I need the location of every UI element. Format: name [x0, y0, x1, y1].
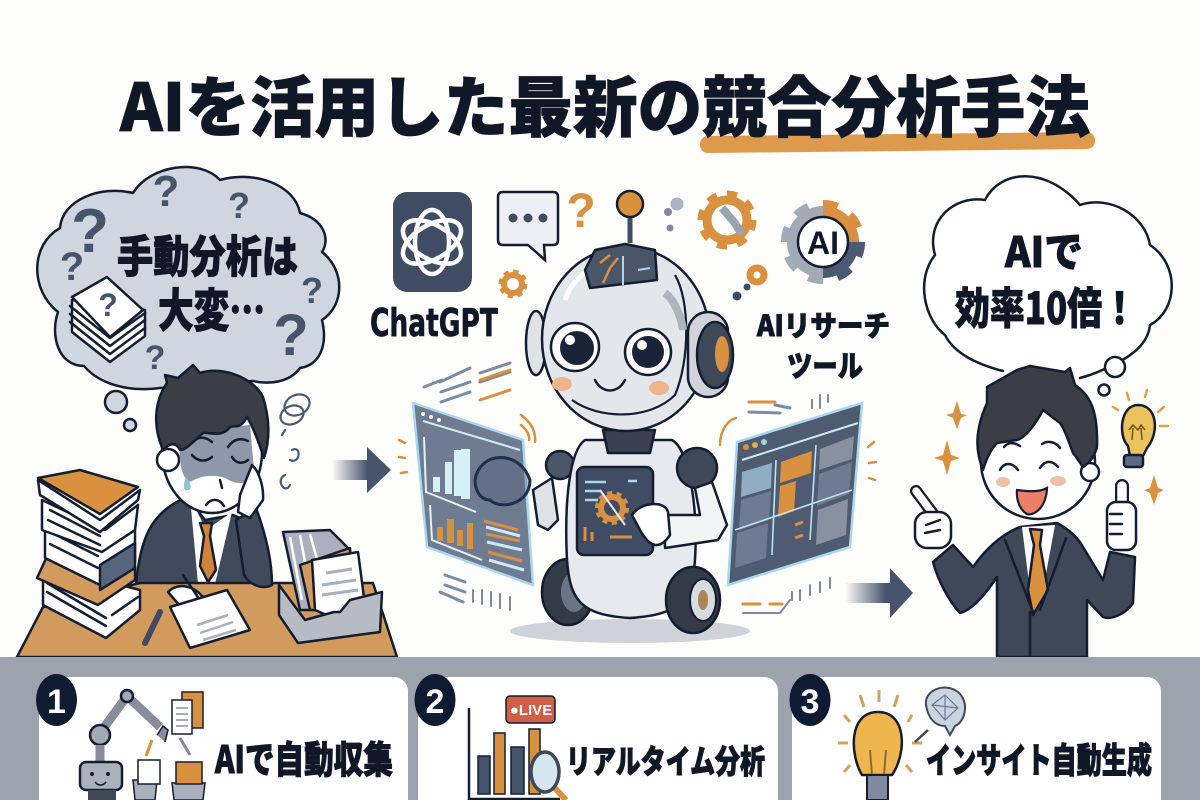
thought bubble small	[124, 419, 136, 431]
left thought cloud	[37, 167, 339, 431]
cheeks and smile	[552, 377, 669, 395]
paper stack	[70, 277, 145, 362]
AI tool label line two: ツール	[787, 344, 863, 387]
head	[981, 405, 1099, 519]
cloud text: AIで	[1004, 219, 1083, 280]
icon: lightbulb and brain	[838, 688, 965, 800]
dizzy scribble	[277, 390, 313, 488]
question marks: ?	[60, 245, 84, 289]
panel: step 1	[36, 674, 408, 800]
question marks: ?	[273, 303, 309, 368]
small orange gear	[501, 272, 525, 296]
left holographic screen	[413, 403, 533, 585]
right arm and hand	[632, 448, 727, 548]
propping arm	[236, 508, 272, 587]
suit	[135, 497, 271, 592]
question marks: ?	[71, 197, 109, 266]
head panel	[585, 244, 657, 288]
neck	[603, 430, 655, 453]
cloud text line two: 効率10倍！	[955, 274, 1137, 337]
right headphone	[688, 312, 733, 397]
badge 1	[36, 674, 77, 726]
worried man at desk	[17, 365, 397, 657]
cloud text: 手動分析は	[117, 221, 298, 285]
robot	[475, 191, 750, 643]
question marks: ?	[228, 185, 250, 226]
badge 2	[414, 674, 456, 726]
eyes	[551, 323, 671, 375]
step 1 label: AIで自動収集	[214, 730, 393, 784]
right holographic screen	[728, 403, 862, 585]
book stack	[37, 470, 140, 638]
happy man	[915, 366, 1168, 657]
hair	[156, 365, 268, 458]
question marks: ?	[301, 270, 323, 311]
helmet details	[565, 270, 686, 414]
shirt and tie	[190, 497, 232, 584]
pen	[145, 612, 160, 643]
floor shadow	[510, 619, 750, 643]
sparkles	[934, 401, 1164, 505]
speech bubble	[498, 192, 558, 260]
cloud text line two: 大変…	[158, 274, 265, 341]
lightbulb	[1113, 390, 1168, 467]
badge 1: 1	[47, 683, 66, 721]
step 3 label: インサイト自動生成	[926, 733, 1152, 784]
left screen orange bars	[437, 519, 473, 549]
bubble large	[1105, 357, 1125, 377]
writing hand and pencil	[168, 575, 208, 612]
badge 2: 2	[426, 683, 444, 721]
right thought cloud	[924, 176, 1172, 396]
data lines top left	[424, 363, 510, 402]
ChatGPT label: ChatGPT	[370, 302, 499, 346]
desk	[17, 583, 397, 657]
right screen cells	[735, 436, 854, 568]
logo knot	[396, 210, 468, 274]
data lines top right	[749, 395, 828, 413]
icon: live chart: ●LIVE	[510, 702, 552, 719]
arrow: to happy man	[845, 568, 913, 618]
bubble small	[1098, 384, 1110, 396]
small orange dashes around screens	[399, 415, 876, 480]
shirt and tie	[1005, 525, 1066, 655]
paper stack: ?	[98, 287, 118, 323]
thought bubble large	[105, 391, 127, 413]
step 2 label: リアルタイム分析	[566, 737, 765, 783]
AI tool label: AIリサーチ	[756, 303, 890, 344]
panel: step 2	[414, 674, 778, 800]
thumbs up hand	[1107, 486, 1136, 550]
arrow: to robot	[332, 447, 391, 493]
ChatGPT logo	[393, 192, 472, 292]
left arm and hand	[475, 451, 574, 530]
left wheel	[542, 559, 594, 625]
badge 3	[790, 674, 830, 726]
question marks	[60, 167, 323, 377]
bottom band	[0, 657, 1200, 800]
suit body	[933, 523, 1135, 657]
pointing hand	[915, 491, 951, 548]
orange dots trail	[732, 268, 764, 300]
panel: step 3	[790, 674, 1161, 800]
question marks: ?	[145, 339, 165, 377]
left screen bars	[433, 449, 470, 499]
torso	[566, 440, 696, 618]
hair	[977, 366, 1097, 470]
AI gear: AI	[807, 225, 839, 261]
AI gear	[786, 205, 860, 279]
file box	[279, 530, 382, 643]
right wheel	[666, 567, 720, 633]
hand on cheek	[238, 465, 263, 518]
orange question mark: ?	[566, 185, 596, 238]
left screen list	[484, 521, 524, 570]
data lines bottom	[440, 575, 830, 613]
icon: live chart	[469, 696, 566, 800]
left ear	[526, 311, 546, 375]
icon: robot arm	[80, 690, 205, 800]
head	[157, 391, 262, 513]
notebook	[170, 590, 250, 648]
chest screen	[577, 467, 653, 555]
antenna	[617, 191, 643, 243]
head	[542, 247, 710, 431]
orange wrench gear	[701, 194, 753, 246]
question marks: ?	[153, 167, 179, 216]
title: AIを活用した最新の競合分析手法	[119, 55, 1090, 151]
badge 3: 3	[801, 683, 819, 721]
gray puffs	[664, 198, 684, 232]
